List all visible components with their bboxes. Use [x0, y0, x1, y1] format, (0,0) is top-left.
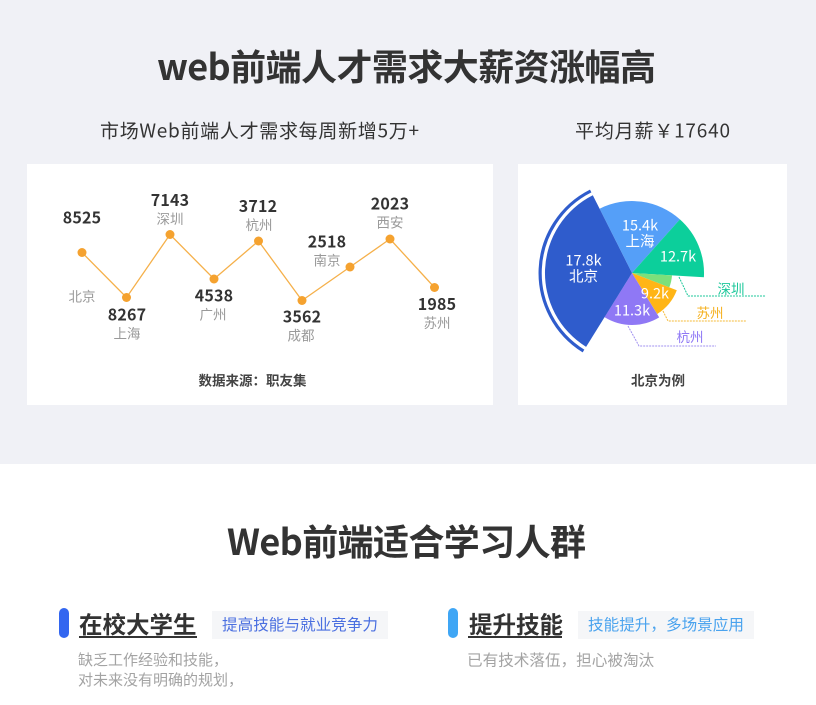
pie value labels [565, 214, 696, 320]
panel: pie chart [518, 164, 787, 405]
pie value labels: 12.7k [660, 246, 696, 266]
badge [578, 611, 754, 639]
chart labels: 苏州 [424, 312, 450, 332]
chart labels: 杭州 [246, 214, 272, 234]
leader: 苏州: 苏州 [696, 302, 724, 322]
badge: 提高技能与就业竞争力 [222, 613, 378, 635]
leader: 苏州 [663, 302, 746, 322]
line chart series [78, 230, 439, 305]
card: 提升技能 [448, 606, 754, 670]
pie value labels: 11.3k [614, 300, 650, 320]
leader: 深圳: 深圳 [718, 278, 744, 298]
marker bar [59, 608, 69, 638]
card heading: 在校大学生 [79, 606, 196, 640]
leader: 深圳 [679, 277, 766, 298]
chart labels: 2518 [308, 228, 346, 252]
card: 在校大学生 [59, 606, 388, 690]
heading: average salary: 平均月薪￥17640 [575, 116, 730, 144]
chart labels: 北京 [68, 286, 96, 306]
chart labels: 8267 [108, 302, 146, 326]
chart labels: 2023 [371, 190, 409, 214]
pie caption: 北京为例 [631, 370, 685, 390]
chart labels: 广州 [200, 304, 226, 324]
chart labels: 8525 [63, 204, 101, 228]
panel: line chart [27, 164, 493, 405]
description: 缺乏工作经验和技能， [78, 649, 228, 670]
description: 已有技术落伍，担心被淘汰 [467, 648, 655, 670]
leader: 杭州: 杭州 [676, 326, 704, 346]
chart labels: 4538 [195, 282, 233, 306]
chart labels: 上海 [114, 322, 140, 342]
chart labels: 成都 [288, 324, 314, 344]
source note: 数据来源：职友集 [198, 370, 307, 390]
pie value labels: 9.2k [641, 282, 669, 304]
pie value labels: 上海 [626, 230, 654, 252]
rose pie slices [540, 191, 704, 351]
chart labels [63, 187, 456, 344]
leader: 杭州 [628, 326, 716, 346]
pie value labels: 北京 [569, 266, 598, 286]
description: 对未来没有明确的规划， [78, 669, 243, 690]
chart labels: 南京 [314, 250, 340, 270]
pie value labels: 15.4k [622, 214, 658, 236]
title: web前端人才需求大薪资涨幅高: web前端人才需求大薪资涨幅高 [157, 39, 656, 91]
title: Web前端适合学习人群: Web前端适合学习人群 [227, 514, 586, 566]
heading: weekly demand: 市场Web前端人才需求每周新增5万+ [100, 116, 419, 144]
chart labels: 3562 [283, 304, 321, 328]
chart labels: 3712 [239, 193, 277, 217]
marker bar [448, 608, 458, 638]
chart labels: 西安 [376, 212, 404, 232]
badge [212, 611, 388, 639]
chart labels: 7143 [151, 187, 189, 211]
card heading: 提升技能 [469, 606, 563, 640]
chart labels: 1985 [418, 291, 456, 315]
description [78, 649, 243, 690]
pie value labels: 17.8k [565, 250, 602, 270]
badge: 技能提升，多场景应用 [588, 613, 744, 635]
chart labels: 深圳 [156, 208, 184, 228]
